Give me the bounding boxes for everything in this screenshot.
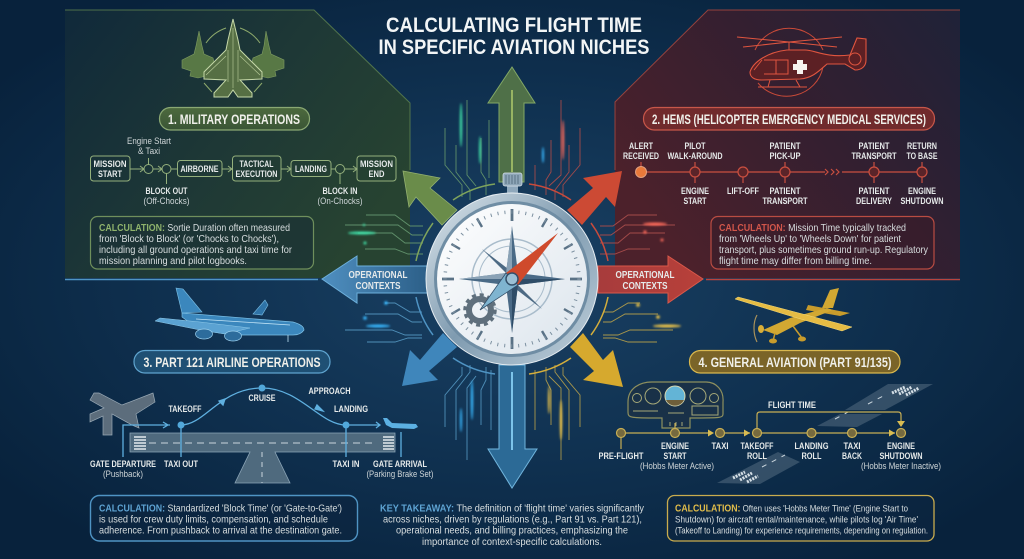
icon: cessna bbox=[735, 288, 852, 344]
flow: military timeline: MISSION bbox=[360, 159, 393, 170]
arrow: upper right red bbox=[567, 171, 622, 225]
flow: military timeline: EXECUTION bbox=[236, 169, 278, 180]
callout: HEMS calculation bbox=[711, 216, 934, 269]
heading: general aviation bbox=[690, 350, 900, 373]
icon: airliner bbox=[155, 288, 304, 342]
flow: military timeline: Engine Start bbox=[127, 136, 171, 147]
flow: general aviation timeline: BACK bbox=[842, 451, 862, 462]
divider lines bbox=[65, 278, 318, 280]
flow: general aviation timeline: ENGINE bbox=[661, 441, 689, 452]
flow: military timeline: MISSION bbox=[94, 159, 127, 170]
heading: military operations: 1. MILITARY OPERATIONS bbox=[168, 111, 300, 127]
icon: diagonal runway bbox=[717, 384, 933, 484]
flow: military timeline: (Off-Chocks) bbox=[144, 196, 190, 207]
diagram: gate to gate profile: TAXI OUT bbox=[164, 459, 198, 470]
diagram: gate to gate profile: CRUISE bbox=[248, 393, 276, 404]
flow: HEMS timeline: PATIENT bbox=[770, 141, 801, 152]
title: IN SPECIFIC AVIATION NICHES bbox=[378, 35, 650, 59]
callout: HEMS calculation: CALCULATION: Mission Time typically tracked bbox=[719, 222, 906, 234]
arrow: lower left blue bbox=[402, 333, 457, 386]
key takeaway: importance of context-specific calculations. bbox=[422, 536, 602, 548]
key takeaway: across niches, driven by regulations (e.g., Part 91 vs. Part 121), bbox=[383, 514, 642, 526]
callout: HEMS calculation: from 'Wheels Up' to 'Wheels Down' for patient bbox=[719, 233, 901, 245]
flow: military timeline: (On-Chocks) bbox=[318, 196, 362, 207]
flow: HEMS timeline: TRANSPORT bbox=[762, 196, 808, 207]
flow: general aviation timeline: ROLL bbox=[747, 451, 767, 462]
flow: HEMS timeline: DELIVERY bbox=[856, 196, 892, 207]
icon: gate and departing plane bbox=[90, 393, 155, 435]
key takeaway: operational needs, and billing practices, emphasizing the bbox=[396, 524, 628, 536]
flow: general aviation timeline: (Hobbs Meter Inactive) bbox=[861, 461, 941, 472]
callout: general aviation calculation: (Takeoff to Landing) for experience requirements, depending on regulation. bbox=[675, 526, 928, 536]
compass stopwatch bbox=[426, 173, 598, 365]
key takeaway: KEY TAKEAWAY: The definition of 'flight time' varies significantly bbox=[380, 502, 645, 514]
flow: HEMS timeline bbox=[623, 141, 944, 207]
flow: military timeline: START bbox=[98, 169, 122, 180]
flow: general aviation timeline: SHUTDOWN bbox=[880, 451, 923, 462]
arrow: operational contexts right: CONTEXTS bbox=[622, 280, 668, 292]
flow: general aviation timeline: ROLL bbox=[802, 451, 822, 462]
callout: military calculation bbox=[90, 216, 314, 269]
flow: general aviation timeline: (Hobbs Meter Active) bbox=[640, 461, 714, 472]
panel: HEMS bbox=[615, 10, 960, 278]
icon: arriving plane bbox=[383, 418, 418, 429]
arrow: operational contexts right bbox=[598, 256, 703, 303]
flow: general aviation timeline: TAXI bbox=[712, 441, 728, 452]
flow: HEMS timeline: PILOT bbox=[684, 141, 706, 152]
arrow: operational contexts right: OPERATIONAL bbox=[616, 269, 675, 281]
flow: HEMS timeline: START bbox=[684, 196, 707, 207]
icon: instrument panel bbox=[628, 382, 723, 428]
diagram: gate to gate profile: TAXI IN bbox=[332, 459, 360, 470]
key takeaway bbox=[380, 502, 645, 548]
diagram: gate to gate profile: GATE DEPARTURE bbox=[90, 459, 156, 470]
flow: HEMS timeline: PICK-UP bbox=[770, 151, 801, 162]
heading: general aviation: 4. GENERAL AVIATION (PART 91/135) bbox=[698, 354, 892, 370]
heading: military operations bbox=[160, 108, 310, 130]
flow: military timeline: & Taxi bbox=[138, 146, 160, 157]
callout: military calculation: including all ground operations and taxi time for bbox=[99, 244, 292, 256]
flow: general aviation timeline: ENGINE bbox=[887, 441, 915, 452]
heading: part 121: 3. PART 121 AIRLINE OPERATIONS bbox=[144, 354, 320, 370]
diagram: gate to gate profile: GATE ARRIVAL bbox=[373, 459, 427, 470]
flow: HEMS timeline: PATIENT bbox=[858, 141, 890, 152]
diagram: gate to gate profile: TAKEOFF bbox=[168, 404, 202, 415]
flow: HEMS timeline: TRANSPORT bbox=[852, 151, 897, 162]
flow: general aviation timeline: TAKEOFF bbox=[740, 441, 774, 452]
diagram: gate to gate profile: (Pushback) bbox=[103, 469, 143, 480]
callout: airline calculation bbox=[90, 496, 358, 541]
diagram: gate to gate profile: (Parking Brake Set) bbox=[366, 469, 434, 480]
flow: military timeline: LANDING bbox=[295, 164, 327, 175]
flow: HEMS timeline: WALK-AROUND bbox=[668, 151, 723, 162]
flow: general aviation timeline: START bbox=[664, 451, 687, 462]
arrow: up green bbox=[488, 67, 535, 182]
flow: general aviation timeline: FLIGHT TIME bbox=[768, 400, 816, 411]
title: CALCULATING FLIGHT TIME bbox=[386, 13, 642, 37]
flow: HEMS timeline: LIFT-OFF bbox=[727, 186, 759, 197]
ring arcs around compass bbox=[416, 184, 608, 374]
arrow: upper left green bbox=[403, 171, 457, 225]
flow: HEMS timeline: TO BASE bbox=[906, 151, 938, 162]
callout: general aviation calculation: Shutdown) for aircraft rental/maintenance, while pilots log 'Air Time' bbox=[675, 514, 918, 526]
callout: airline calculation: CALCULATION: Standardized 'Block Time' (or 'Gate-to-Gate') bbox=[99, 502, 342, 514]
icon: crown bbox=[503, 173, 522, 194]
flow: general aviation timeline: LANDING bbox=[794, 441, 828, 452]
flow: HEMS timeline: PATIENT bbox=[858, 186, 890, 197]
arrow: operational contexts left: CONTEXTS bbox=[356, 280, 400, 292]
flow: military timeline bbox=[90, 136, 396, 207]
callout: military calculation: mission planning and pilot logbooks. bbox=[99, 255, 247, 267]
flow: military timeline: TACTICAL bbox=[240, 159, 274, 170]
needle bbox=[480, 233, 558, 310]
flow: general aviation timeline: TAXI bbox=[844, 441, 860, 452]
callout: HEMS calculation: transport, plus sometimes ground run-up. Regulatory bbox=[719, 244, 929, 256]
title bbox=[378, 13, 650, 59]
diagram: gate to gate profile: LANDING bbox=[334, 404, 368, 415]
flow: HEMS timeline: ENGINE bbox=[908, 186, 936, 197]
flow: HEMS timeline: ENGINE bbox=[681, 186, 709, 197]
icon: gear bbox=[465, 295, 495, 325]
icon: helicopter bbox=[737, 28, 866, 96]
arrow: lower right yellow bbox=[570, 333, 623, 387]
heading: HEMS bbox=[644, 108, 934, 130]
heading: part 121 bbox=[134, 350, 330, 373]
flow: HEMS timeline: ALERT bbox=[629, 141, 653, 152]
callout: general aviation calculation: CALCULATION: Often uses 'Hobbs Meter Time' (Engine Start to bbox=[675, 502, 908, 514]
callout: military calculation: CALCULATION: Sortie Duration often measured bbox=[99, 222, 290, 234]
callout: airline calculation: is used for crew duty limits, compensation, and schedule bbox=[99, 514, 328, 526]
flow: military timeline: AIRBORNE bbox=[180, 164, 218, 175]
compass rose bbox=[459, 226, 565, 333]
panel: part 121 airline bbox=[90, 288, 434, 541]
clock tick marks bbox=[442, 209, 582, 349]
flow: general aviation timeline bbox=[598, 400, 941, 472]
flow: HEMS timeline: RECEIVED bbox=[623, 151, 659, 162]
flow: military timeline: END bbox=[368, 169, 385, 180]
diagram: gate to gate profile: APPROACH bbox=[308, 386, 351, 397]
arrow: down blue bbox=[488, 365, 537, 488]
callout: general aviation calculation bbox=[668, 496, 934, 541]
callout: HEMS calculation: flight time may differ from billing time. bbox=[719, 255, 872, 267]
flow: HEMS timeline: PATIENT bbox=[770, 186, 801, 197]
diagram: gate to gate profile bbox=[90, 384, 434, 483]
flow: military timeline: BLOCK OUT bbox=[146, 186, 188, 197]
flow: military timeline: BLOCK IN bbox=[322, 186, 358, 197]
runway bbox=[130, 433, 395, 483]
panel: military operations bbox=[65, 10, 410, 278]
flow: general aviation timeline: PRE-FLIGHT bbox=[598, 451, 644, 462]
arrow: operational contexts left: OPERATIONAL bbox=[348, 269, 408, 281]
panel: general aviation bbox=[598, 288, 941, 541]
glowing circuit dots bbox=[348, 103, 681, 440]
arrow: operational contexts left bbox=[322, 256, 428, 303]
flow: HEMS timeline: RETURN bbox=[907, 141, 937, 152]
callout: military calculation: from 'Block to Block' (or 'Chocks to Chocks'), bbox=[99, 233, 279, 245]
icon: fighter jets bbox=[182, 19, 284, 97]
callout: airline calculation: adherence. From pushback to arrival at the destination gate. bbox=[99, 524, 342, 536]
flow: HEMS timeline: SHUTDOWN bbox=[900, 196, 944, 207]
circuit traces bbox=[345, 100, 675, 460]
